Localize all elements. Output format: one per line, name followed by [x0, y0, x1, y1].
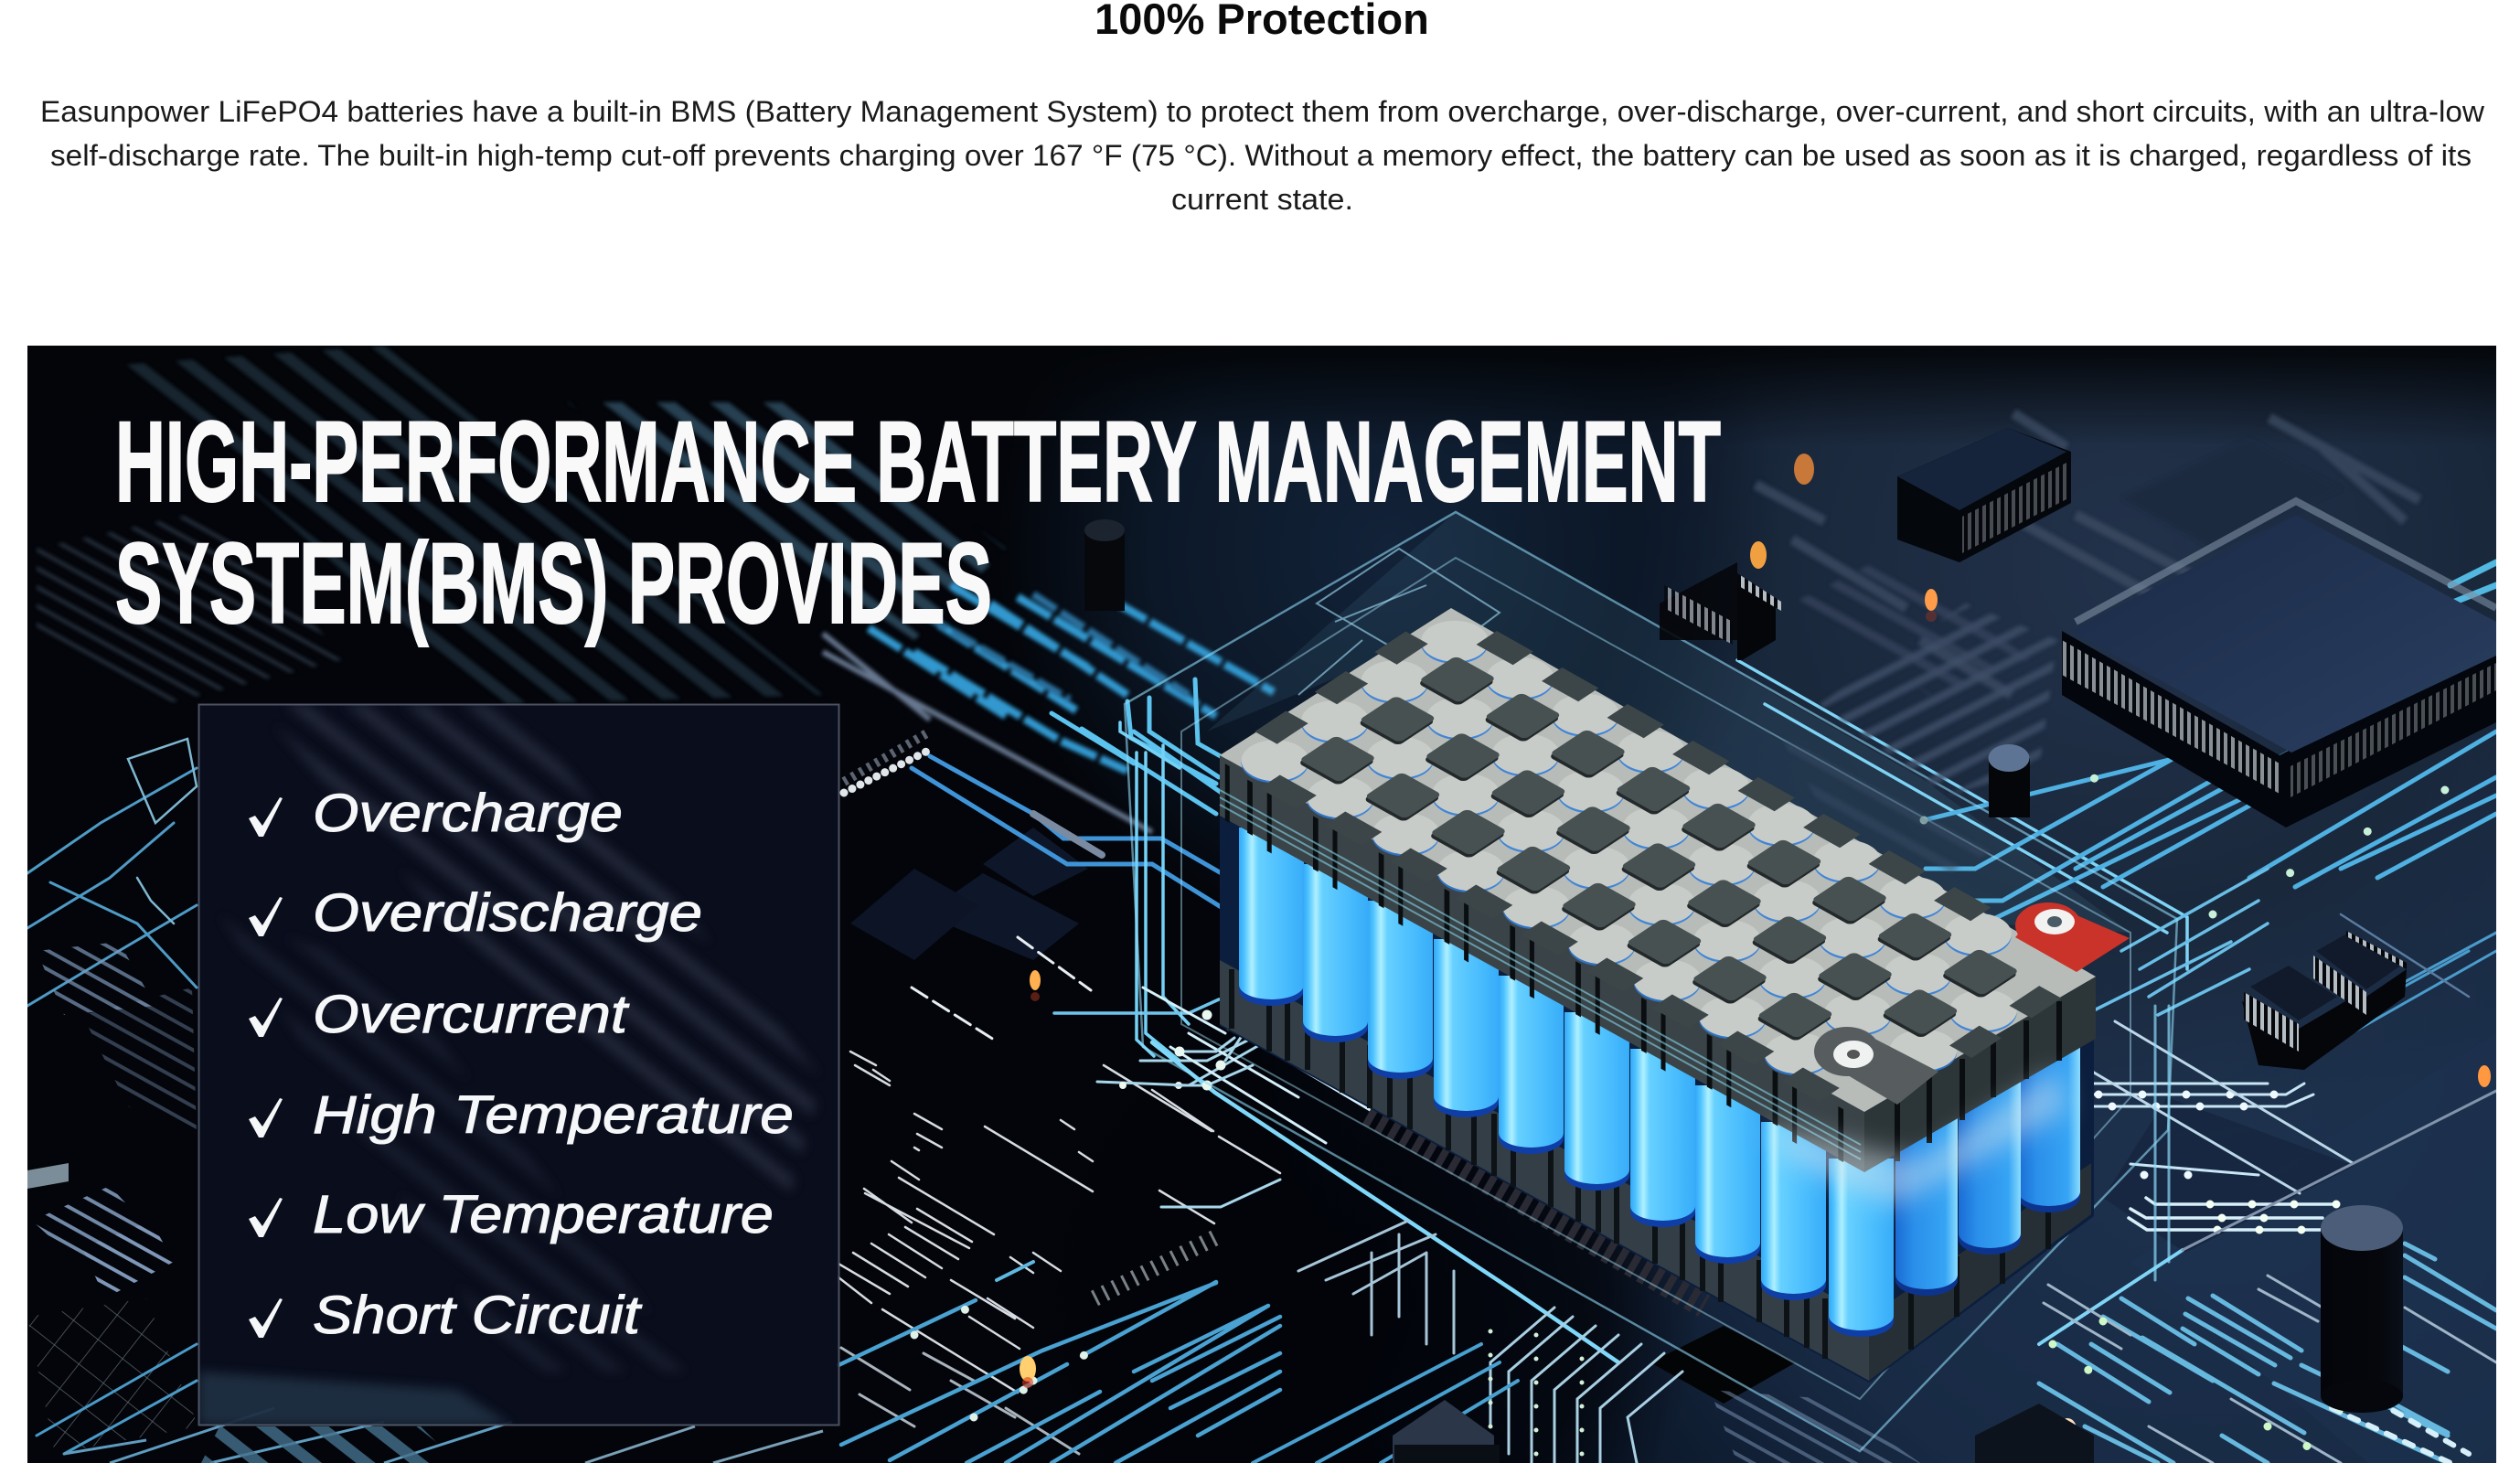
- intro text block: Easunpower LiFePO4 batteries have a built-in BMS (Battery Management System) to protect them from overcharge, over-discharge, over-current, and short circuits, with an ultra-low: [40, 95, 2485, 128]
- white and blue traces right of list panel: [838, 1033, 1280, 1463]
- title: [115, 399, 1721, 647]
- top face cell grid: [1242, 621, 2061, 1094]
- right side cells: [2021, 1048, 2080, 1212]
- intro text block: self-discharge rate. The built-in high-temp cut-off prevents charging over 167 °F (75 °C). Without a memory effect, the battery can be used as soon as it is charged, regardless of its: [50, 139, 2472, 172]
- top face: [1220, 608, 2096, 1112]
- front side cells: [1239, 828, 1304, 1006]
- protection checklist: [249, 784, 794, 1345]
- battery pack: [1211, 603, 2130, 1383]
- blurred top-left circuit streaks: [37, 346, 1274, 832]
- right side circuit traces: [1737, 562, 2496, 1463]
- orange indicator LEDs: [1750, 454, 1938, 622]
- chip and pads left of battery: [844, 679, 1280, 1223]
- hero image: circuit board with battery pack: [27, 346, 2496, 1463]
- item: Low Temperature: Low Temperature: [313, 1185, 774, 1244]
- negative terminal plate: [1814, 1027, 1938, 1105]
- positive terminal red tab: [2015, 902, 2130, 972]
- pack shadow block: [1220, 805, 2094, 1383]
- item: Short Circuit: Short Circuit: [313, 1286, 643, 1345]
- lower centre traces and chip pins: [1143, 988, 1920, 1463]
- spacer shadows: [1297, 658, 2018, 1078]
- left margin circuit detail: [27, 739, 198, 1454]
- intro text block: [40, 95, 2485, 216]
- blue cell rims: [1242, 647, 2017, 1075]
- item: High Temperature: High Temperature: [313, 1085, 794, 1145]
- pcb tonal regions: [1039, 359, 2496, 1463]
- item: Overcurrent: Overcurrent: [313, 985, 630, 1044]
- big processor chip: [2062, 501, 2496, 828]
- small chips and capacitors: [1084, 428, 2407, 1463]
- intro text block: current state.: [1171, 183, 1353, 216]
- item: Overdischarge: Overdischarge: [313, 883, 702, 943]
- title: SYSTEM(BMS) PROVIDES: [115, 520, 992, 647]
- cell caps: [1242, 621, 2017, 1073]
- edge posts: [1211, 603, 2103, 1128]
- translucent list panel: [198, 704, 839, 1426]
- blurred steel pcb bars, upper right: [1756, 413, 2419, 878]
- square spacers: [1299, 656, 2019, 1075]
- item: Overcharge: Overcharge: [313, 784, 623, 843]
- lower cell holder: [1220, 960, 2091, 1381]
- upper cell holder side bands: [1220, 755, 2096, 1207]
- glass wireframe around the pack: [1125, 512, 2177, 1451]
- bottom edge traces below list panel: [64, 1408, 823, 1463]
